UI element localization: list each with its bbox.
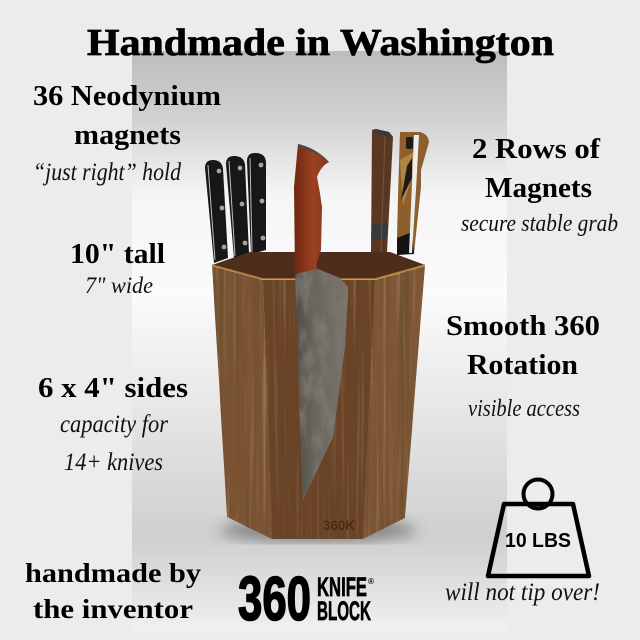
title: Handmade in Washington <box>87 22 554 64</box>
text block: magnets: 36 Neodynium <box>33 80 221 112</box>
caption: will not tip over: will not tip over! <box>445 579 600 606</box>
product photo: knife block with knives <box>205 129 430 542</box>
text block: handmade by the inventor <box>25 558 202 624</box>
icon: 10 lbs weight: 10 LBS <box>505 530 571 552</box>
text block: rotation: Smooth 360 <box>446 310 600 342</box>
text block: magnets <box>33 80 221 186</box>
block shadow <box>220 518 416 542</box>
text block: rows of magnets: Magnets <box>485 172 592 204</box>
text block: rotation: Rotation <box>467 349 578 381</box>
block body faces <box>205 262 430 542</box>
text block: sides: 14+ knives <box>64 449 163 476</box>
text block: handmade by the inventor: handmade by <box>25 558 202 588</box>
text block: sides: 6 x 4" sides <box>38 372 188 404</box>
text block: sides: capacity for <box>60 411 168 438</box>
paring and utility knives with black handles <box>205 153 266 263</box>
text block: dimensions <box>70 238 165 298</box>
brand logo: ® <box>368 577 374 586</box>
text block: dimensions: 7" wide <box>85 273 153 298</box>
text block: rows of magnets <box>461 133 618 237</box>
text block: magnets: “just right” hold <box>33 159 181 186</box>
text block: rotation <box>446 310 600 422</box>
chef knife handle <box>294 144 329 274</box>
icon: 10 lbs weight <box>488 480 589 576</box>
brand logo: 360 <box>238 565 311 634</box>
text block: rows of magnets: 2 Rows of <box>472 133 600 165</box>
text block: dimensions: 10" tall <box>70 238 165 270</box>
dark wood handled knife <box>371 129 393 252</box>
brand logo: KNIFE <box>317 572 367 602</box>
mixed wood handled knife <box>397 132 429 255</box>
text block: rows of magnets: secure stable grab <box>461 211 618 237</box>
engraved logo on block: 360K <box>323 517 355 533</box>
photo backdrop panel <box>132 51 507 631</box>
inlay edge <box>212 265 425 279</box>
text block: magnets: magnets <box>74 119 181 151</box>
text block: sides <box>38 372 188 476</box>
text block: handmade by the inventor: the inventor <box>33 594 193 624</box>
brand logo: BLOCK <box>317 596 371 626</box>
block top face <box>212 252 425 279</box>
text block: rotation: visible access <box>468 396 580 422</box>
chef knife blade <box>295 269 348 500</box>
